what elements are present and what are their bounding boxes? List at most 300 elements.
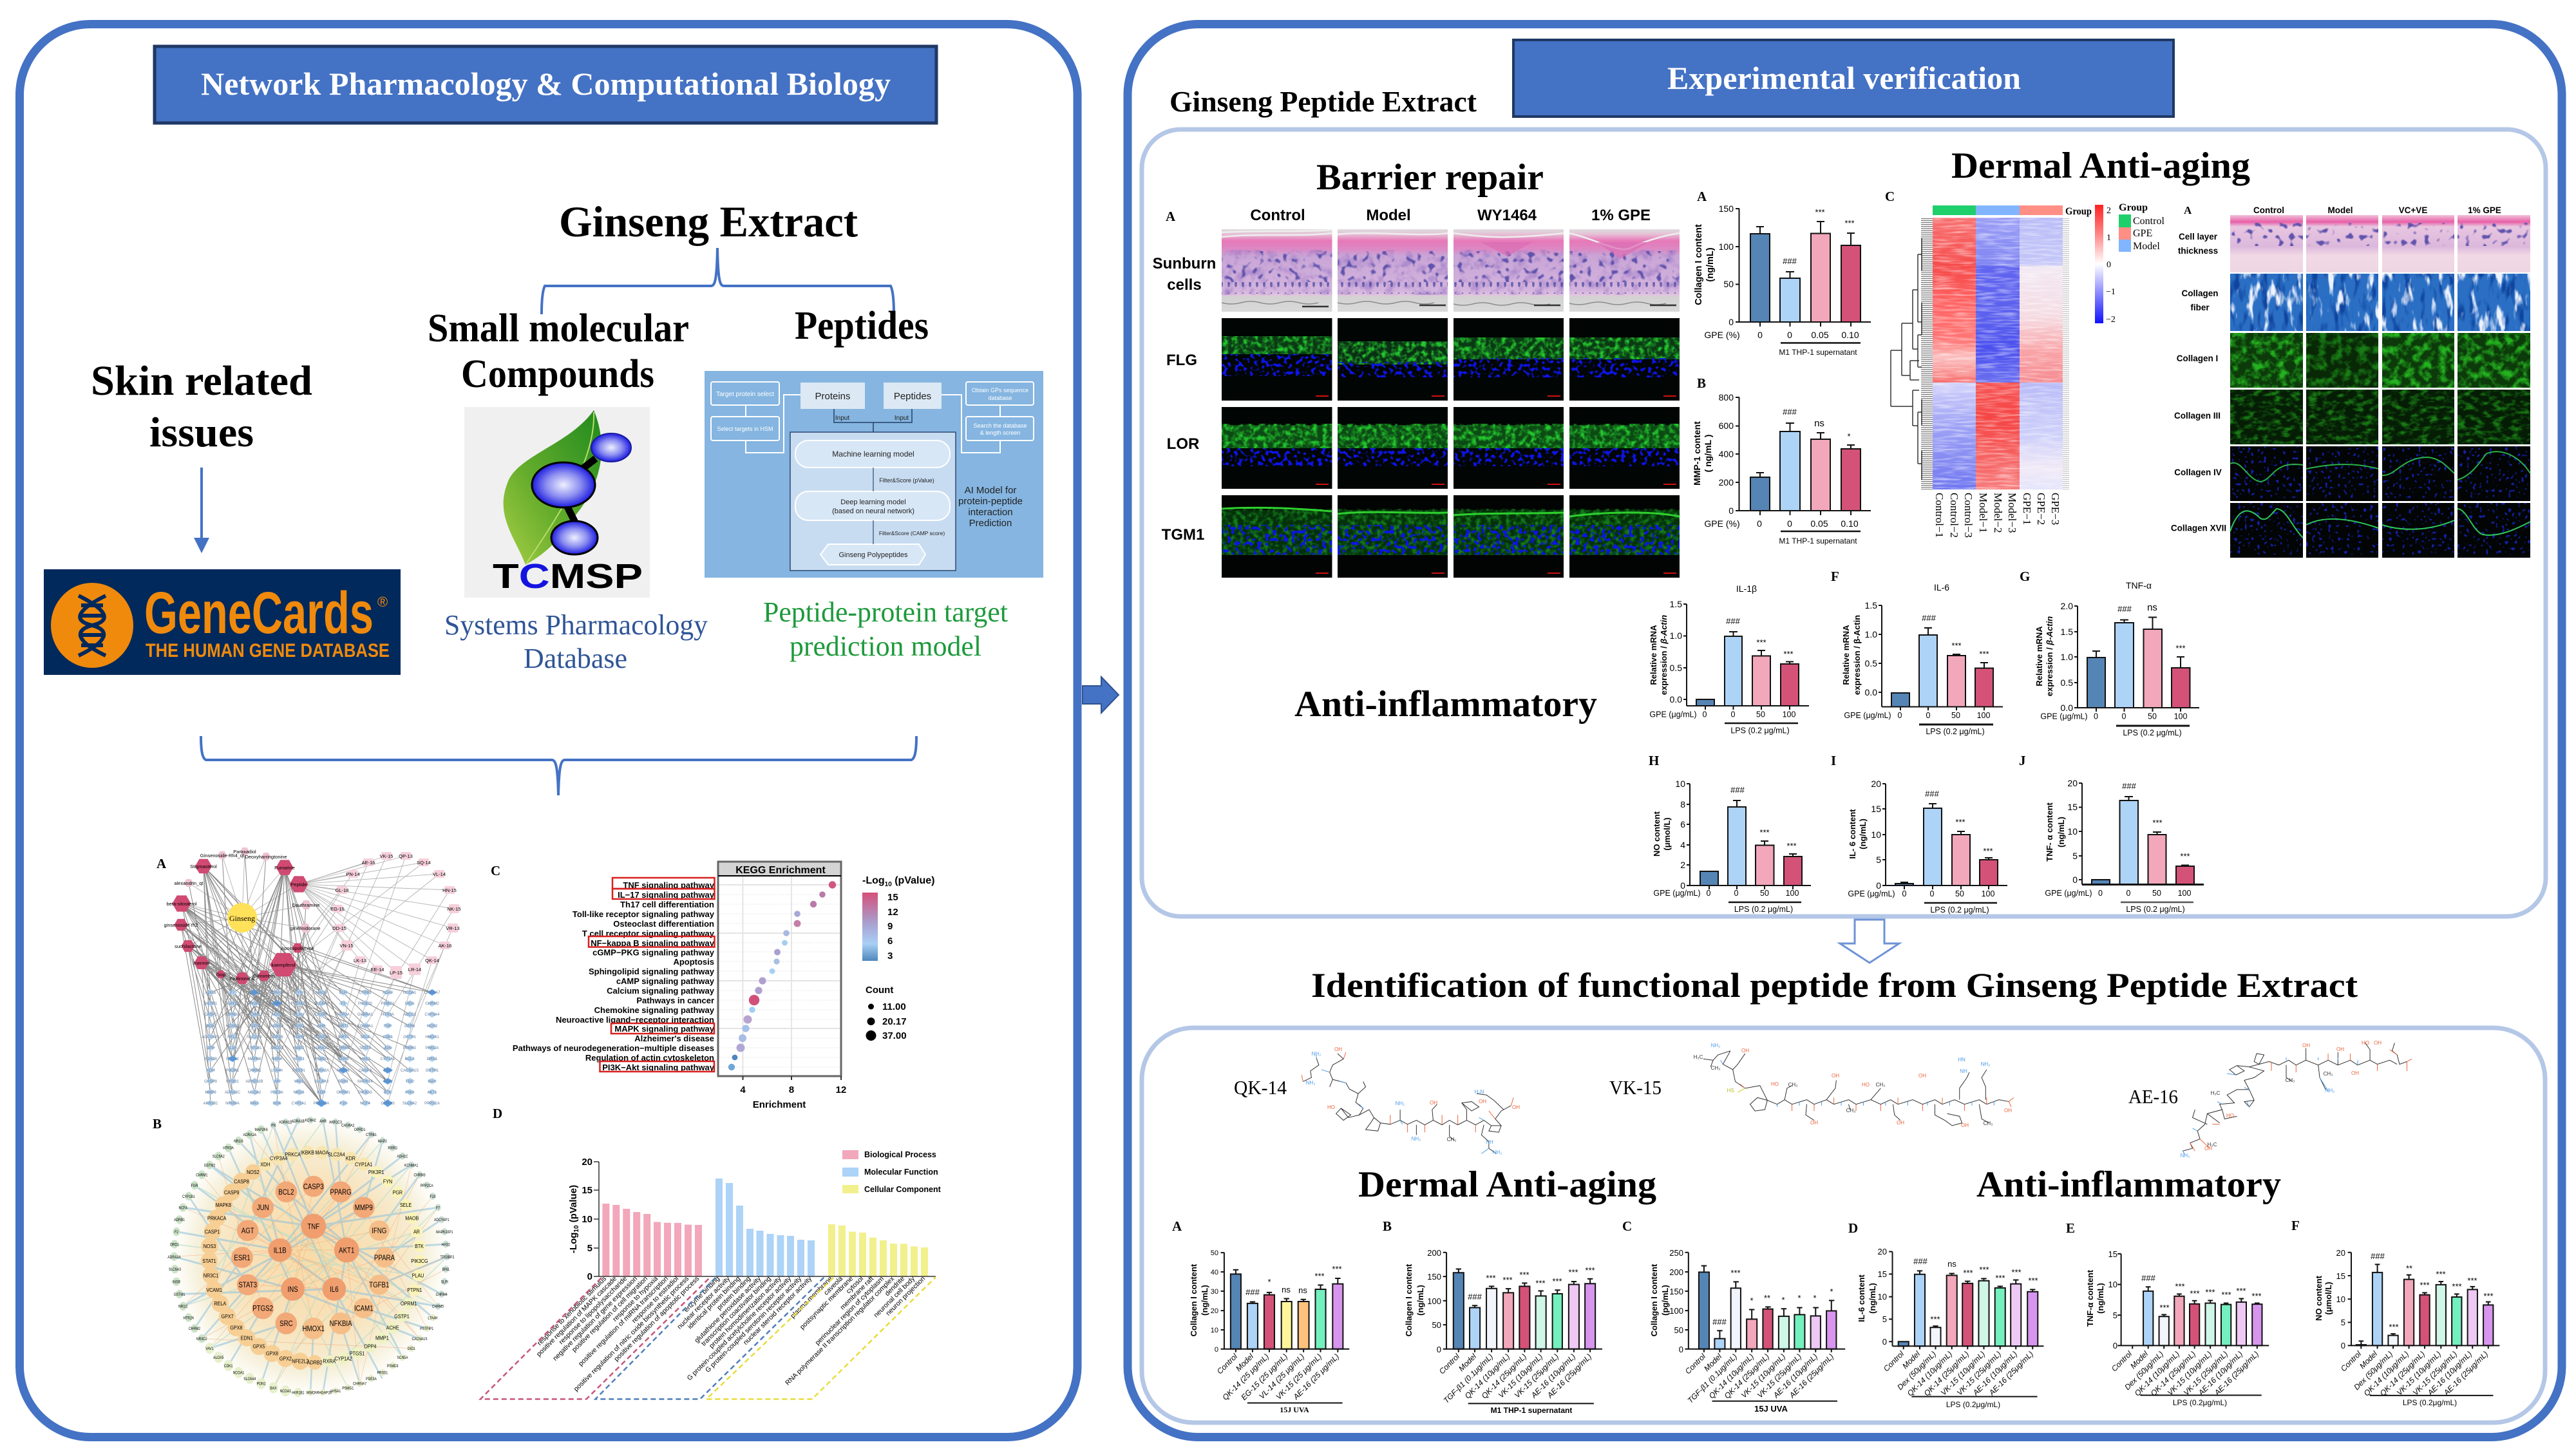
chart: protein-protein interaction network: [167, 1117, 454, 1397]
chart: IL-6 content: IL- 6 content: [1848, 809, 1857, 859]
chart: compound-target-peptide network: AKR1B1: [203, 1102, 218, 1106]
chart: protein-protein interaction network: NR3C2: [196, 1338, 207, 1341]
panel: dermal anti-aging micrographs: A: [2184, 204, 2192, 216]
panel label: KEGG: C: [491, 863, 500, 878]
legend: KEGG colour and count: (pValue): [892, 875, 934, 886]
chart: peptide collagen I, M1 THP-1: 100: [1427, 1296, 1441, 1306]
chart: IL-6 mRNA: [1831, 569, 2003, 736]
chart: TNF-α content: 50: [2152, 889, 2161, 898]
chart: IL-1β mRNA: ***: [1756, 638, 1766, 647]
chart: compound-target-peptide network: TOP2B: [270, 1036, 283, 1039]
chart: compound-target-peptide network: GL-18: [336, 887, 348, 893]
chart: GO enrichment bars: response to hypoxia: [611, 1275, 659, 1323]
chart: peptide TNF-α content: LPS (0.2μg/mL): [2173, 1398, 2227, 1407]
chart: protein-protein interaction network: MAOA: [315, 1150, 329, 1156]
chart: TNF-α content: 100: [2178, 889, 2191, 898]
chart: KEGG enrichment dot plot: 8: [789, 1084, 794, 1095]
chart: GO enrichment bars: cytosol: [845, 1275, 865, 1295]
diagram: AI model for protein-peptide interaction prediction: Machine learning model: [832, 450, 914, 459]
chart: protein-protein interaction network: GPX5: [253, 1343, 265, 1350]
chart: MMP-1 content: MMP-1 content: [1692, 421, 1702, 486]
bracket: ginseng extract branches: [542, 248, 894, 314]
chart: peptide collagen I, UVA: VL-14 (25 μg/mL): [1257, 1352, 1306, 1401]
diagram: AI model for protein-peptide interaction prediction: protein-peptide: [958, 496, 1023, 507]
chart: peptide collagen I, M1 THP-1: ***: [1486, 1273, 1496, 1283]
chart: IL-6 mRNA: 100: [1977, 711, 1990, 720]
chart: peptide collagen I, UVA: 10: [1211, 1327, 1218, 1334]
chart: peptide collagen I, M1 THP-1: ###: [1468, 1292, 1482, 1302]
chart: peptide IL-6 content: LPS (0.2μg/mL): [1946, 1400, 2000, 1409]
chart: TNF-α content: ###: [2122, 781, 2137, 791]
chart: peptide TNF-α content: AE-16 (10μg/mL): [2196, 1349, 2244, 1397]
chart: compound-target-peptide network: ADRA2C: [225, 1091, 241, 1095]
chart: compound-target-peptide network: OPRM1: [336, 1091, 350, 1095]
panel: barrier repair micrographs: cells: [1167, 276, 1202, 294]
chart: peptide collagen I, UVA (pg/mL): Control: [1683, 1352, 1707, 1376]
legend: KEGG colour and count: [862, 875, 934, 1041]
chart: compound-target-peptide network: kaempferol: [271, 962, 296, 968]
chart: protein-protein interaction network: CHRM1: [196, 1173, 207, 1178]
chart: peptide collagen I, UVA (pg/mL): 150: [1669, 1287, 1683, 1296]
chart: IL-6 content: 5: [1876, 855, 1881, 865]
molecule: VK-15 structure: [1694, 1043, 2014, 1128]
legend: heatmap scale and group: GPE: [2133, 228, 2152, 239]
chart: compound-target-peptide network: VN-15: [339, 943, 354, 949]
chart: protein-protein interaction network: PSTPIP1: [420, 1327, 433, 1331]
chart: protein-protein interaction network: RELA: [214, 1301, 227, 1307]
chart: peptide IL-6 content: AE-16 (10μg/mL): [1971, 1349, 2019, 1397]
molecule: AE-16 structure: CH₃: [2324, 1071, 2333, 1077]
logo: genecards: ®: [377, 594, 388, 610]
chart: peptide collagen I, UVA (pg/mL): VK-15 (10μg/mL): [1739, 1352, 1787, 1400]
chart: protein-protein interaction network: JUN: [257, 1204, 269, 1212]
chart: protein-protein interaction network: NOS2: [247, 1169, 260, 1175]
heading: anti-inflammatory peptides: Anti-inflammatory: [1976, 1164, 2281, 1205]
chart: peptide collagen I, M1 THP-1: AE-16 (10μg/mL): [1529, 1352, 1577, 1400]
logo: genecards: GeneCards: [144, 580, 374, 646]
chart: peptide collagen I, UVA (pg/mL): *: [1830, 1287, 1833, 1296]
molecule: AE-16 structure: OH: [2336, 1046, 2344, 1052]
chart: GO enrichment bars: protein binding: [715, 1275, 752, 1312]
panel: dermal anti-aging micrographs: Cell layer: [2179, 232, 2218, 242]
panel label: network B: B: [153, 1116, 162, 1132]
molecule: VK-15 structure: OH: [1810, 1120, 1818, 1126]
chart: compound-target-peptide network: ADRA1B: [314, 1036, 329, 1039]
chart: peptide collagen I, UVA: EG-15 (25 μg/mL): [1239, 1352, 1289, 1402]
panel: barrier repair micrographs: Control: [1250, 207, 1305, 224]
chart: protein-protein interaction network: INSR: [173, 1280, 180, 1285]
molecule: QK-14 structure: NH₂: [1412, 1136, 1421, 1142]
molecule: QK-14 structure: OH: [1430, 1100, 1437, 1106]
chart: protein-protein interaction network: SLC6A4: [243, 1377, 256, 1381]
chart: collagen I content: 50: [1723, 279, 1734, 289]
molecule: QK-14 structure: [1302, 1046, 1520, 1155]
chart: peptide collagen I, UVA (pg/mL): *: [1750, 1296, 1754, 1305]
molecule: VK-15 structure: CH₃: [1876, 1082, 1885, 1088]
molecule: AE-16 structure: NH₂: [2181, 1153, 2190, 1159]
chart: protein-protein interaction network: PLAU: [412, 1273, 424, 1279]
chart: compound-target-peptide network: Girinimbin: [253, 973, 275, 979]
chart: TNF-α mRNA: Relative mRNA: [2034, 626, 2044, 687]
chart: compound-target-peptide network: CASP1: [204, 1013, 217, 1017]
chart: peptide collagen I, M1 THP-1: 0: [1437, 1345, 1441, 1354]
chart: peptide collagen I, M1 THP-1: 150: [1427, 1272, 1441, 1282]
heading: ginseng extract: Ginseng Extract: [559, 197, 858, 246]
legend: heatmap scale and group: [2095, 202, 2164, 325]
chart: peptide collagen I, M1 THP-1: ***: [1568, 1267, 1578, 1277]
chart: compound-target-peptide network: IFNG: [405, 1091, 414, 1095]
chart: GO enrichment bars: plasma membrane: [789, 1275, 834, 1320]
panel: barrier repair micrographs: [1153, 207, 1684, 580]
chart: TNF-α content: TNF- α content: [2045, 802, 2054, 862]
chart: compound-target-peptide network: PTGS1: [337, 1069, 350, 1073]
chart: collagen I content: 0: [1728, 317, 1734, 327]
chart: compound-target-peptide network: HTR3A: [381, 1013, 394, 1017]
chart: compound-target-peptide network: CYP1B1: [247, 1046, 262, 1050]
chart: peptide collagen I, M1 THP-1: M1 THP-1 supernatant: [1491, 1406, 1572, 1415]
panel: functional peptides: [1142, 1028, 2545, 1423]
text: small molecular compounds: Small molecular: [428, 307, 689, 350]
chart: compound-target-peptide network: SLPI: [339, 991, 348, 995]
chart: peptide collagen I, UVA: ***: [1332, 1264, 1342, 1274]
chart: collagen I content: M1 THP-1 supernatant: [1779, 348, 1857, 357]
chart: protein-protein interaction network: F10: [430, 1195, 435, 1199]
chart: GO enrichment bars: response to lipopolysaccharide: [558, 1275, 629, 1346]
chart: compound-target-peptide network: CTRB1: [359, 991, 372, 995]
chart: compound-target-peptide network: IL1B: [229, 1046, 236, 1050]
chart: protein-protein interaction network: ADRA1D: [279, 1121, 292, 1125]
chart: IL-6 mRNA: Relative mRNA: [1841, 625, 1851, 685]
chart: compound-target-peptide network: suchilactone: [175, 943, 202, 949]
chart: KEGG enrichment dot plot: KEGG Enrichment: [735, 865, 826, 876]
chart: peptide collagen I, UVA: 40: [1211, 1269, 1218, 1276]
text: peptide-protein target prediction model: [763, 596, 1008, 662]
chart: GO enrichment bars: transcription coactivator binding: [700, 1275, 773, 1348]
chart: GO enrichment bars: 10: [582, 1214, 592, 1225]
text: skin related issues: Skin related: [91, 357, 312, 404]
chart: IL-6 mRNA: 0.5: [1865, 658, 1877, 668]
chart: TNF-α content: LPS (0.2 μg/mL): [2126, 905, 2185, 914]
chart: protein-protein interaction network: BAX: [270, 1387, 277, 1391]
chart: protein-protein interaction network: ADRA1B: [292, 1120, 305, 1124]
chart: compound-target-peptide network: NFKBIA: [225, 1102, 240, 1106]
chart: peptide collagen I, UVA: ns: [1298, 1285, 1307, 1295]
chart: peptide collagen I, UVA (pg/mL): (pg/mL): [1660, 1285, 1670, 1316]
chart: collagen I content: 0: [1757, 330, 1763, 340]
chart: protein-protein interaction network: INS: [288, 1285, 298, 1294]
chart: peptide collagen I, M1 THP-1: ***: [1585, 1265, 1595, 1275]
diagram: AI model for protein-peptide interaction prediction: Ginseng Polypeptides: [838, 551, 908, 559]
chart: KEGG enrichment dot plot: Alzheimer's disease: [634, 1034, 714, 1043]
chart: compound-target-peptide network: NR3C1: [226, 1080, 239, 1084]
molecule: QK-14 structure: OH: [1334, 1046, 1342, 1052]
chart: protein-protein interaction network: PPARG: [330, 1188, 352, 1197]
chart: peptide collagen I, UVA: A: [1172, 1218, 1182, 1234]
chart: KEGG enrichment dot plot: Osteoclast differentiation: [613, 919, 714, 929]
chart: protein-protein interaction network: RXRA: [323, 1358, 336, 1365]
diagram: AI model for protein-peptide interaction prediction: Peptides: [894, 391, 931, 402]
chart: GO enrichment bars: positive regulation of cell migration: [571, 1275, 649, 1354]
chart: peptide TNF-α content: ###: [2141, 1273, 2156, 1283]
chart: compound-target-peptide network: CDK1: [383, 1036, 393, 1039]
chart: protein-protein interaction network: STAT1: [202, 1258, 216, 1264]
chart: compound-target-peptide network: SIRT1: [338, 1025, 349, 1028]
chart: protein-protein interaction network: OPRD1: [354, 1128, 365, 1132]
chart: TNF-α mRNA: ns: [2147, 602, 2157, 613]
legend: KEGG colour and count: 10: [885, 881, 892, 888]
chart: MMP-1 content: 200: [1719, 477, 1734, 488]
chart: compound-target-peptide network: CHRM2: [425, 1002, 439, 1006]
chart: IL-1β mRNA: 0.0: [1670, 694, 1682, 705]
chart: protein-protein interaction network: ADRA2A: [167, 1255, 181, 1260]
heading: network pharmacology: Network Pharmacology & Computational Biology: [201, 66, 891, 102]
chart: GO enrichment bars: G protein-coupled serotonin receptor activity: [704, 1274, 804, 1374]
molecule: QK-14 structure: NH: [1486, 1139, 1493, 1145]
chart: KEGG enrichment dot plot: [513, 862, 846, 1110]
chart: peptide collagen I, UVA: *: [1267, 1277, 1271, 1287]
chart: IL-6 content: LPS (0.2 μg/mL): [1930, 905, 1989, 914]
chart: peptide TNF-α content: Control: [2110, 1349, 2134, 1373]
chart: RNA-seq heatmap: Model−2: [1992, 493, 2004, 533]
chart: peptide IL-6 content: (ng/mL): [1868, 1283, 1877, 1314]
chart: protein-protein interaction network: NCOA2: [280, 1390, 291, 1394]
chart: IL-1β mRNA: LPS (0.2 μg/mL): [1730, 726, 1790, 735]
chart: peptide NO content: ***: [2389, 1322, 2399, 1332]
chart: peptide collagen I, UVA (pg/mL): AE-16 (10μg/mL): [1771, 1352, 1819, 1400]
chart: RNA-seq heatmap: Group: [2065, 206, 2092, 217]
chart: peptide collagen I, UVA (pg/mL): 0: [1679, 1345, 1683, 1354]
chart: collagen I content: GPE (%): [1704, 330, 1740, 340]
chart: KEGG enrichment dot plot: NF−kappa B signaling pathway: [591, 938, 715, 948]
chart: GO enrichment bars: Biological Process: [864, 1150, 936, 1159]
chart: peptide NO content: ***: [2467, 1276, 2477, 1285]
chart: protein-protein interaction network: AKT1: [339, 1247, 354, 1255]
chart: peptide NO content: LPS (0.2μg/mL): [2403, 1398, 2457, 1407]
chart: protein-protein interaction network: AR: [413, 1229, 420, 1235]
chart: compound-target-peptide network: PN-14: [346, 871, 360, 877]
legend: KEGG colour and count: 11.00: [882, 1001, 906, 1012]
chart: compound-target-peptide network: NR1I3: [293, 1091, 305, 1095]
chart: IL-6 content: 0: [1876, 880, 1881, 891]
chart: TNF-α mRNA: 0: [2122, 712, 2126, 721]
chart: NO content: 10: [1675, 779, 1685, 789]
chart: protein-protein interaction network: CYP1A2: [334, 1356, 352, 1362]
chart: compound-target-peptide network: ADRB2: [248, 991, 261, 995]
chart: compound-target-peptide network: VK-15: [380, 853, 393, 859]
chart: peptide TNF-α content: E: [2066, 1220, 2075, 1236]
chart: compound-target-peptide network: Diop: [216, 972, 226, 978]
chart: protein-protein interaction network: IKBKB: [301, 1150, 314, 1156]
chart: peptide collagen I, M1 THP-1: ***: [1535, 1278, 1546, 1288]
chart: peptide TNF-α content: VK-15 (10μg/mL): [2166, 1349, 2213, 1397]
panel: barrier repair micrographs: Model: [1366, 207, 1411, 224]
chart: IL-6 content: ###: [1925, 789, 1940, 799]
chart: peptide IL-6 content: ***: [1963, 1268, 1973, 1278]
chart: GO enrichment bars: membrane raft: [838, 1275, 875, 1311]
chart: compound-target-peptide network: SIRT2: [338, 1036, 349, 1039]
chart: RNA-seq heatmap: GPE−1: [2021, 493, 2033, 525]
molecule: QK-14 structure: OH: [1512, 1104, 1520, 1110]
chart: MMP-1 content: ns: [1814, 418, 1824, 429]
chart: compound-target-peptide network: CASP9: [204, 1080, 217, 1084]
heading: identification of functional peptide: Identification of functional peptide from Ginseng Peptide Extract: [1311, 966, 2358, 1005]
chart: KEGG enrichment dot plot: Regulation of actin cytoskeleton: [585, 1053, 714, 1063]
chart: peptide NO content: VK-15 (25μg/mL): [2411, 1349, 2459, 1397]
chart: compound-target-peptide network: LP-15: [390, 970, 402, 976]
chart: TNF-α mRNA: ***: [2175, 643, 2186, 653]
chart: compound-target-peptide network: RXRG: [337, 1057, 349, 1061]
chart: compound-target-peptide network: PPARG: [403, 1046, 417, 1050]
label: QK-14: QK-14: [1234, 1076, 1287, 1099]
chart: GO enrichment bars: Cellular Component: [864, 1185, 942, 1194]
chart: IL-6 mRNA: 1.5: [1865, 600, 1877, 611]
chart: protein-protein interaction network: WWC: [306, 1391, 315, 1396]
chart: IL-1β mRNA: 0.5: [1670, 663, 1682, 673]
chart: MMP-1 content: 0: [1787, 518, 1792, 529]
legend: heatmap scale and group: Model: [2133, 241, 2160, 252]
chart: IL-6 mRNA: F: [1831, 569, 1839, 584]
chart: peptide TNF-α content: QK-14 (10μg/mL): [2133, 1349, 2181, 1398]
chart: protein-protein interaction network: AGT: [242, 1227, 254, 1235]
chart: protein-protein interaction network: NCOA1: [233, 1371, 244, 1376]
chart: peptide collagen I, M1 THP-1: 200: [1427, 1248, 1441, 1258]
chart: protein-protein interaction network: ADRB1: [174, 1218, 185, 1222]
chart: protein-protein interaction network: NFE2L2: [292, 1358, 308, 1365]
chart: protein-protein interaction network: CYP3A4: [270, 1155, 288, 1162]
chart: compound-target-peptide network: LR-14: [408, 967, 421, 972]
molecule: QK-14 structure: CH₃: [1447, 1137, 1456, 1142]
chart: protein-protein interaction network: GPX8: [230, 1325, 243, 1331]
panel: dermal anti-aging micrographs: thickness: [2178, 246, 2218, 256]
chart: protein-protein interaction network: F2: [175, 1231, 178, 1235]
chart: TNF-α mRNA: 2.0: [2061, 601, 2073, 611]
chart: collagen I content: 0: [1787, 330, 1792, 340]
chart: IL-1β mRNA: 100: [1783, 710, 1795, 719]
chart: compound-target-peptide network: ADA9: [383, 991, 393, 995]
chart: peptide NO content: AE-16 (10μg/mL): [2425, 1349, 2474, 1397]
chart: peptide collagen I, UVA: QK-14 (25 μg/mL): [1220, 1352, 1271, 1402]
chart: compound-target-peptide network: PGR: [383, 1069, 392, 1073]
chart: compound-target-peptide network: LK-13: [354, 958, 366, 963]
molecule: AE-16 structure: OH: [2204, 1146, 2212, 1151]
chart: protein-protein interaction network: CACNA1S: [412, 1338, 428, 1341]
chart: protein-protein interaction network: F7: [436, 1206, 440, 1211]
chart: MMP-1 content: 0.05: [1810, 518, 1828, 529]
chart: peptide NO content: ***: [2483, 1291, 2494, 1301]
chart: peptide collagen I, UVA: (ng/mL): [1200, 1285, 1209, 1316]
legend: heatmap scale and group: −1: [2106, 287, 2116, 297]
chart: compound-target-peptide network: AR: [274, 1080, 280, 1084]
chart: NO content: 2: [1680, 860, 1685, 870]
chart: peptide collagen I, UVA (pg/mL): QK-14 (25μg/mL): [1723, 1352, 1771, 1401]
chart: peptide collagen I, M1 THP-1: ***: [1502, 1275, 1513, 1285]
chart: IL-6 content: GPE (μg/mL): [1848, 889, 1895, 898]
chart: TNF-α mRNA: 1.0: [2061, 652, 2073, 662]
chart: compound-target-peptide network: VAV1: [294, 1080, 304, 1084]
molecule: VK-15 structure: H₃C: [1694, 1054, 1703, 1060]
chart: peptide TNF-α content: Dex (50μg/mL): [2123, 1349, 2165, 1392]
chart: peptide collagen I, M1 THP-1: TGF-β1 (0.1μg/mL): [1442, 1352, 1495, 1405]
molecule: AE-16 structure: H₃C: [2211, 1090, 2221, 1096]
chart: peptide NO content: NO content: [2314, 1275, 2324, 1321]
chart: GO enrichment bars: -Log: [568, 1233, 579, 1253]
chart: compound-target-peptide network: SLC6A3: [314, 1080, 329, 1084]
chart: protein-protein interaction network: PIK3CG: [411, 1258, 428, 1264]
molecule: AE-16 structure: HO: [2362, 1040, 2369, 1046]
chart: GO enrichment bars: 5: [587, 1243, 592, 1254]
chart: protein-protein interaction network: HTR3A: [223, 1146, 234, 1151]
heading: anti-inflammatory: Anti-inflammatory: [1294, 684, 1597, 724]
chart: peptide collagen I, UVA (pg/mL): 50: [1674, 1325, 1683, 1335]
chart: IL-6 mRNA: LPS (0.2 μg/mL): [1926, 727, 1985, 736]
panel: dermal anti-aging micrographs: Control: [2253, 205, 2284, 215]
chart: protein-protein interaction network: CASP8: [234, 1179, 249, 1185]
chart: MMP-1 content: *: [1847, 431, 1851, 441]
chart: protein-protein interaction network: MMP9: [355, 1204, 373, 1212]
chart: peptide NO content: Model: [2358, 1349, 2379, 1370]
molecule: VK-15 structure: HO: [1862, 1082, 1870, 1088]
chart: KEGG enrichment dot plot: cAMP signaling pathway: [616, 976, 715, 986]
chart: GO enrichment bars: (pValue): [568, 1185, 579, 1225]
molecule: VK-15 structure: CH₃: [1711, 1065, 1720, 1071]
chart: TNF-α mRNA: 1.5: [2061, 627, 2073, 637]
chart: IL-1β mRNA: Relative mRNA: [1649, 625, 1658, 685]
chart: compound-target-peptide network: PIK3R1: [226, 1069, 240, 1073]
molecule: AE-16 structure: NH₂: [2325, 1088, 2334, 1094]
legend: KEGG colour and count: 3: [887, 951, 893, 961]
chart: TNF-α content: ***: [2152, 818, 2163, 828]
heading: ginseng peptide extract: Ginseng Peptide Extract: [1170, 86, 1477, 118]
chart: IL-1β mRNA: ***: [1783, 649, 1794, 659]
chart: KEGG enrichment dot plot: Apoptosis: [673, 957, 714, 967]
chart: compound-target-peptide network: CYP1A1: [380, 1057, 395, 1061]
chart: protein-protein interaction network: PDE3A: [366, 1377, 377, 1381]
chart: compound-target-peptide network: PRKCA: [426, 1046, 439, 1050]
chart: GO enrichment bars: 10: [573, 1225, 580, 1233]
chart: protein-protein interaction network: ALOX5: [213, 1356, 224, 1360]
chart: protein-protein interaction network: PSMG1: [342, 1387, 354, 1391]
chart: compound-target-peptide network: FYN: [295, 991, 303, 995]
heading: dermal anti-aging: Dermal Anti-aging: [1951, 146, 2250, 186]
chart: compound-target-peptide network: MAP2: [294, 1046, 305, 1050]
chart: TNF-α mRNA: ###: [2117, 604, 2132, 614]
molecule: VK-15 structure: NH₂: [1711, 1043, 1720, 1048]
chart: IL-6 content: 0: [1930, 889, 1935, 898]
chart: protein-protein interaction network: PIK3R1: [368, 1169, 384, 1175]
chart: compound-target-peptide network: ABHD12B: [245, 1080, 263, 1084]
chart: NO content: ***: [1759, 828, 1770, 837]
chart: peptide collagen I, M1 THP-1: Model: [1457, 1352, 1478, 1373]
chart: peptide TNF-α content: 5: [2113, 1311, 2117, 1320]
chart: protein-protein interaction network: HAS2: [442, 1243, 450, 1247]
chart: peptide collagen I, M1 THP-1: B: [1383, 1218, 1392, 1234]
text: skin related issues: [91, 357, 312, 456]
chart: protein-protein interaction network: CYP1B1: [182, 1195, 195, 1199]
chart: peptide collagen I, UVA: ###: [1245, 1287, 1260, 1297]
panel: barrier repair micrographs: TGM1: [1162, 526, 1204, 544]
chart: compound-target-peptide network: CYP3A4: [424, 1013, 440, 1017]
chart: IL-6 content: I: [1831, 753, 1836, 768]
chart: peptide collagen I, UVA: [1172, 1218, 1349, 1414]
molecule: QK-14 structure: NH₂: [1396, 1101, 1405, 1106]
chart: protein-protein interaction network: PTPN1: [407, 1287, 422, 1293]
diagram: AI model for protein-peptide interaction prediction: & length screen: [980, 430, 1020, 436]
chart: GO enrichment bars: positive regulation of apoptotic process: [612, 1275, 701, 1363]
chart: collagen I content: Collagen I content: [1694, 224, 1704, 305]
molecule: VK-15 structure: OH: [1741, 1048, 1749, 1054]
chart: protein-protein interaction network: MMP1: [375, 1335, 389, 1341]
chart: protein-protein interaction network: PPP2CA: [421, 1184, 433, 1188]
